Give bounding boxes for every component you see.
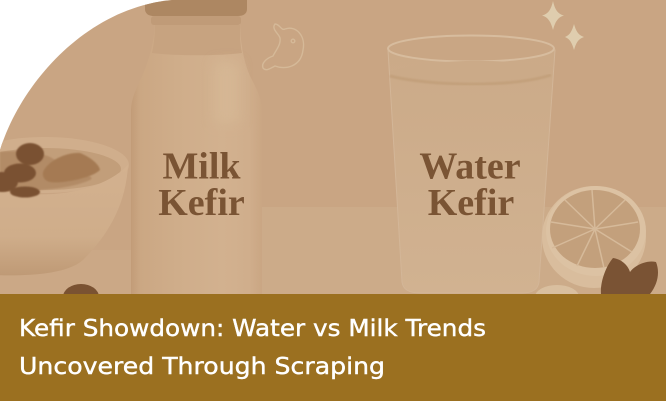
granola — [0, 151, 92, 191]
glass — [388, 36, 555, 293]
icon: stomach — [263, 24, 304, 70]
garlic clove — [536, 285, 578, 294]
label: milk kefir: Kefir — [158, 182, 245, 224]
sparkles — [542, 1, 584, 50]
leaves — [601, 258, 658, 294]
bottle — [131, 0, 262, 294]
title: Kefir Showdown: Water vs Milk Trends — [19, 314, 486, 342]
label: water kefir: Water — [419, 146, 521, 188]
lemon slice — [542, 186, 646, 288]
blueberry on table — [64, 284, 98, 294]
bottle cap — [145, 0, 247, 16]
blueberries — [0, 143, 44, 198]
photo panel — [0, 0, 666, 310]
title band — [0, 294, 666, 401]
label: milk kefir: Milk — [162, 146, 241, 188]
strawberry — [43, 153, 100, 182]
bowl of fruit — [0, 137, 129, 275]
label: water kefir: Kefir — [428, 182, 514, 224]
title: Uncovered Through Scraping — [19, 352, 385, 380]
